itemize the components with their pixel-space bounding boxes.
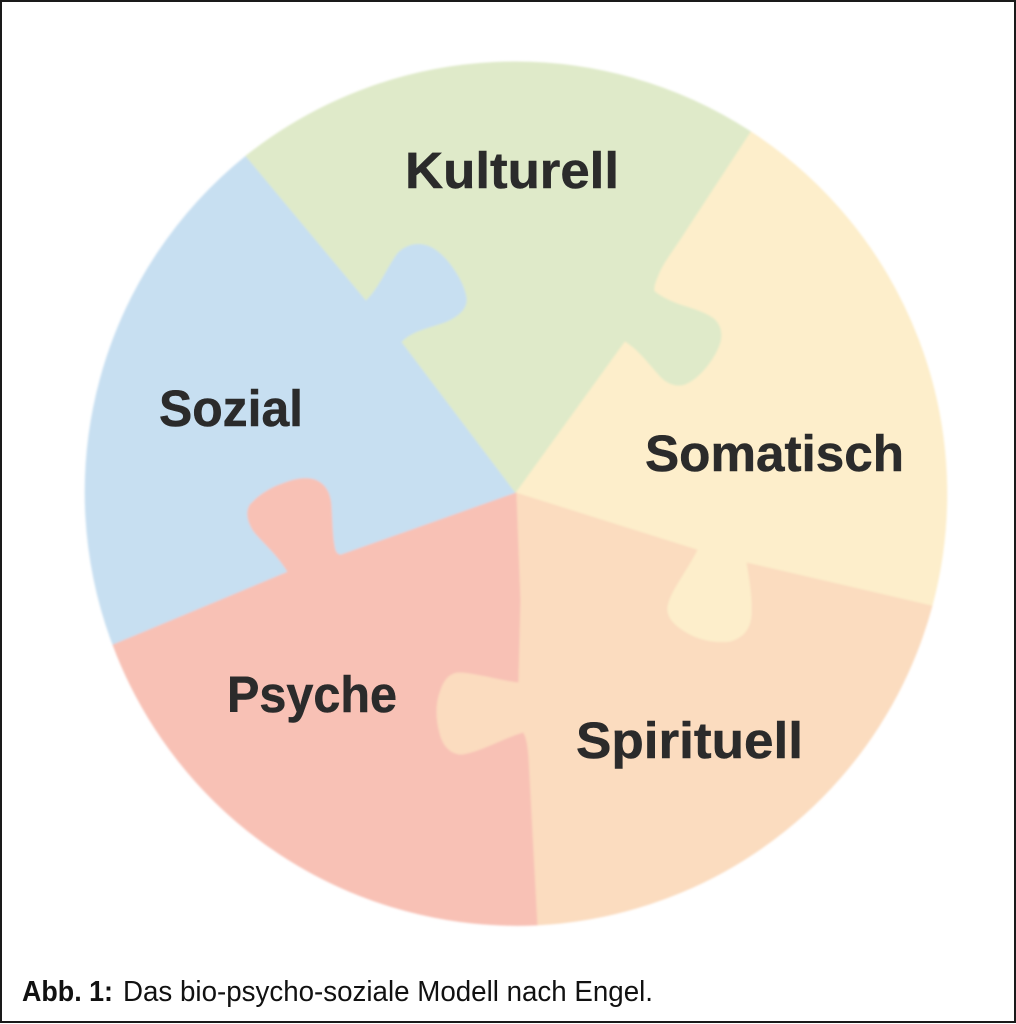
caption label: Abb. 1: <box>22 976 113 1008</box>
label: Spirituell: Spirituell <box>576 712 803 769</box>
puzzle piece: Spirituell (peach) <box>436 493 932 925</box>
puzzle circle <box>85 62 947 925</box>
puzzle piece: Kulturell (green) <box>246 62 751 493</box>
puzzle piece: Psyche (red) <box>113 479 537 925</box>
label: Somatisch: Somatisch <box>645 425 904 482</box>
puzzle piece: Somatisch (yellow) <box>516 132 947 643</box>
caption <box>22 976 653 1008</box>
puzzle piece: Sozial (blue) <box>85 156 516 650</box>
label: Psyche: Psyche <box>227 666 397 723</box>
label: Sozial: Sozial <box>159 380 303 437</box>
label: Kulturell: Kulturell <box>405 142 619 199</box>
caption text: Das bio-psycho-soziale Modell nach Engel. <box>123 976 653 1008</box>
